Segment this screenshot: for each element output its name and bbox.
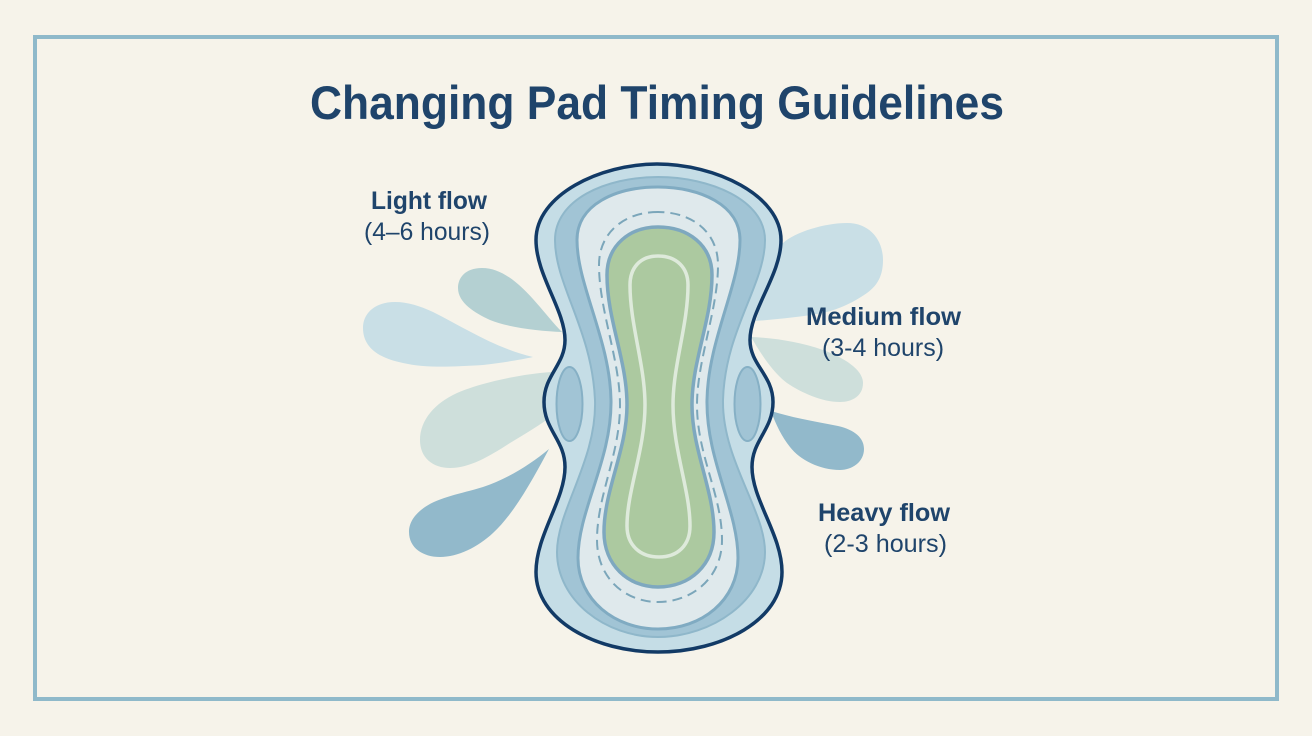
label: light flow: Light flow — [371, 187, 488, 215]
title: Changing Pad Timing Guidelines — [310, 76, 1004, 129]
droplet: light blue left — [363, 302, 533, 367]
droplet: blue left — [409, 449, 549, 557]
dashed stitching line — [597, 212, 722, 602]
label: light flow: (4–6 hours) — [364, 218, 490, 246]
label: heavy flow — [818, 499, 951, 558]
label: medium flow — [806, 303, 962, 362]
right droplets — [751, 223, 883, 470]
label: medium flow: (3-4 hours) — [822, 334, 944, 362]
right side pod — [734, 367, 760, 441]
left droplets — [363, 268, 562, 557]
label: medium flow: Medium flow — [806, 303, 962, 331]
white inner channel — [627, 256, 690, 557]
label: heavy flow: (2-3 hours) — [824, 530, 947, 558]
droplet: light blue right — [756, 223, 883, 321]
droplet: pale green left — [420, 372, 552, 468]
droplet: pale green right — [751, 337, 863, 402]
pad outer body — [536, 164, 782, 652]
droplet: upper teal left — [458, 268, 562, 332]
label: light flow — [364, 187, 490, 246]
pad illustration — [536, 164, 782, 652]
light absorbent layer — [577, 187, 740, 629]
medium blue band — [555, 177, 765, 637]
green absorbent core — [604, 227, 714, 587]
label: heavy flow: Heavy flow — [818, 499, 951, 527]
left side pod — [556, 367, 582, 441]
droplet: blue right — [771, 411, 864, 470]
